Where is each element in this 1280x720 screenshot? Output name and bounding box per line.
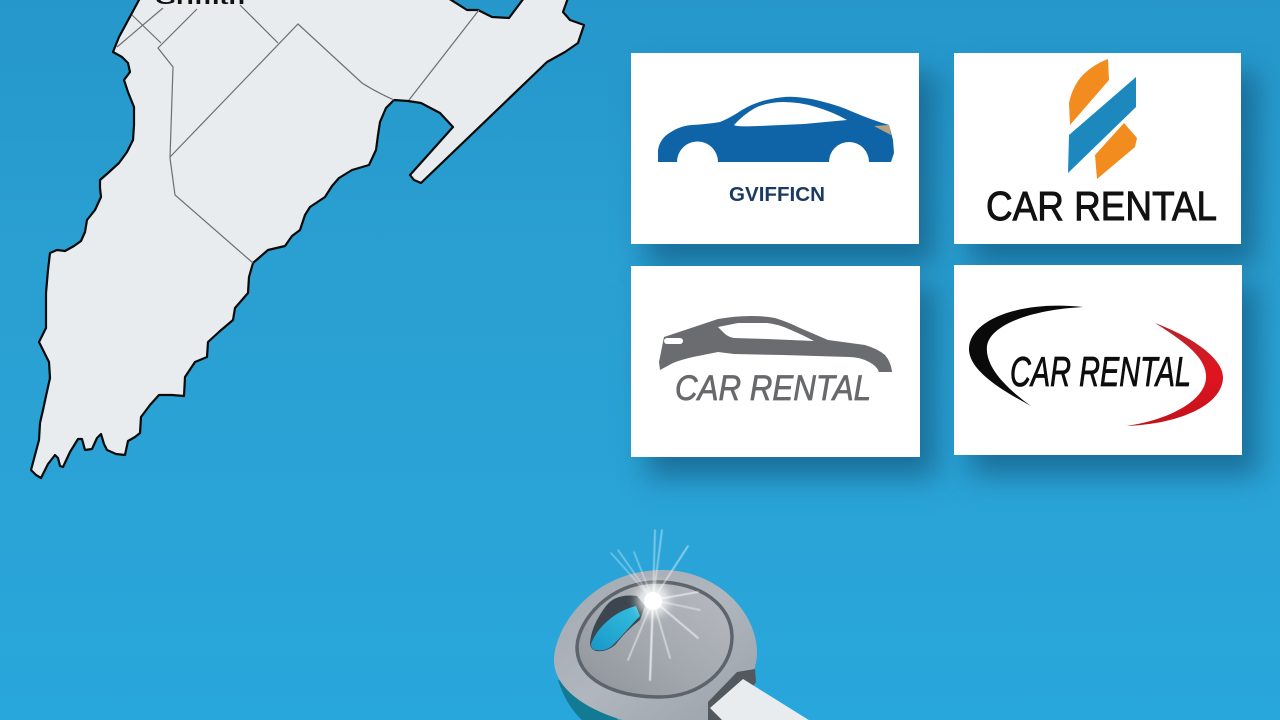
- icon: blue car: [658, 97, 894, 162]
- logo 2: orange and blue stripes with wordmark: [986, 59, 1217, 229]
- icon: stripes: [1069, 59, 1109, 125]
- key body shade: [558, 680, 620, 720]
- wordmark: GVIFFICN: [729, 184, 825, 206]
- key head rim: [554, 570, 757, 720]
- key shank collar: [708, 669, 756, 720]
- panel: logo card 2 background: [954, 53, 1241, 244]
- key slot: [590, 595, 645, 651]
- headlight: [664, 338, 683, 344]
- panel: logo card 1 background: [631, 53, 919, 244]
- logo 1: blue car and wordmark: [658, 97, 894, 206]
- map district borders: [117, 5, 479, 263]
- icon: grey car: [659, 316, 892, 372]
- wordmark: CAR RENTAL: [675, 369, 871, 408]
- map of peninsula: [31, 0, 584, 478]
- wordmark: CAR RENTAL: [1010, 348, 1191, 395]
- sparkle: [611, 530, 700, 680]
- wordmark: CAR RENTAL: [986, 183, 1217, 229]
- panel: logo card 3 background: [631, 266, 920, 457]
- black swoosh: [969, 306, 1083, 406]
- red swoosh: [1126, 323, 1223, 426]
- logo 3: grey car with wordmark: [659, 316, 892, 408]
- logo 4: swoosh oval with wordmark: [969, 306, 1223, 426]
- key shank: [710, 679, 812, 720]
- tail light: [874, 125, 891, 135]
- panel: logo card 4 background: [954, 265, 1242, 455]
- icon: car key: [554, 530, 812, 720]
- key head inner ring: [577, 582, 732, 697]
